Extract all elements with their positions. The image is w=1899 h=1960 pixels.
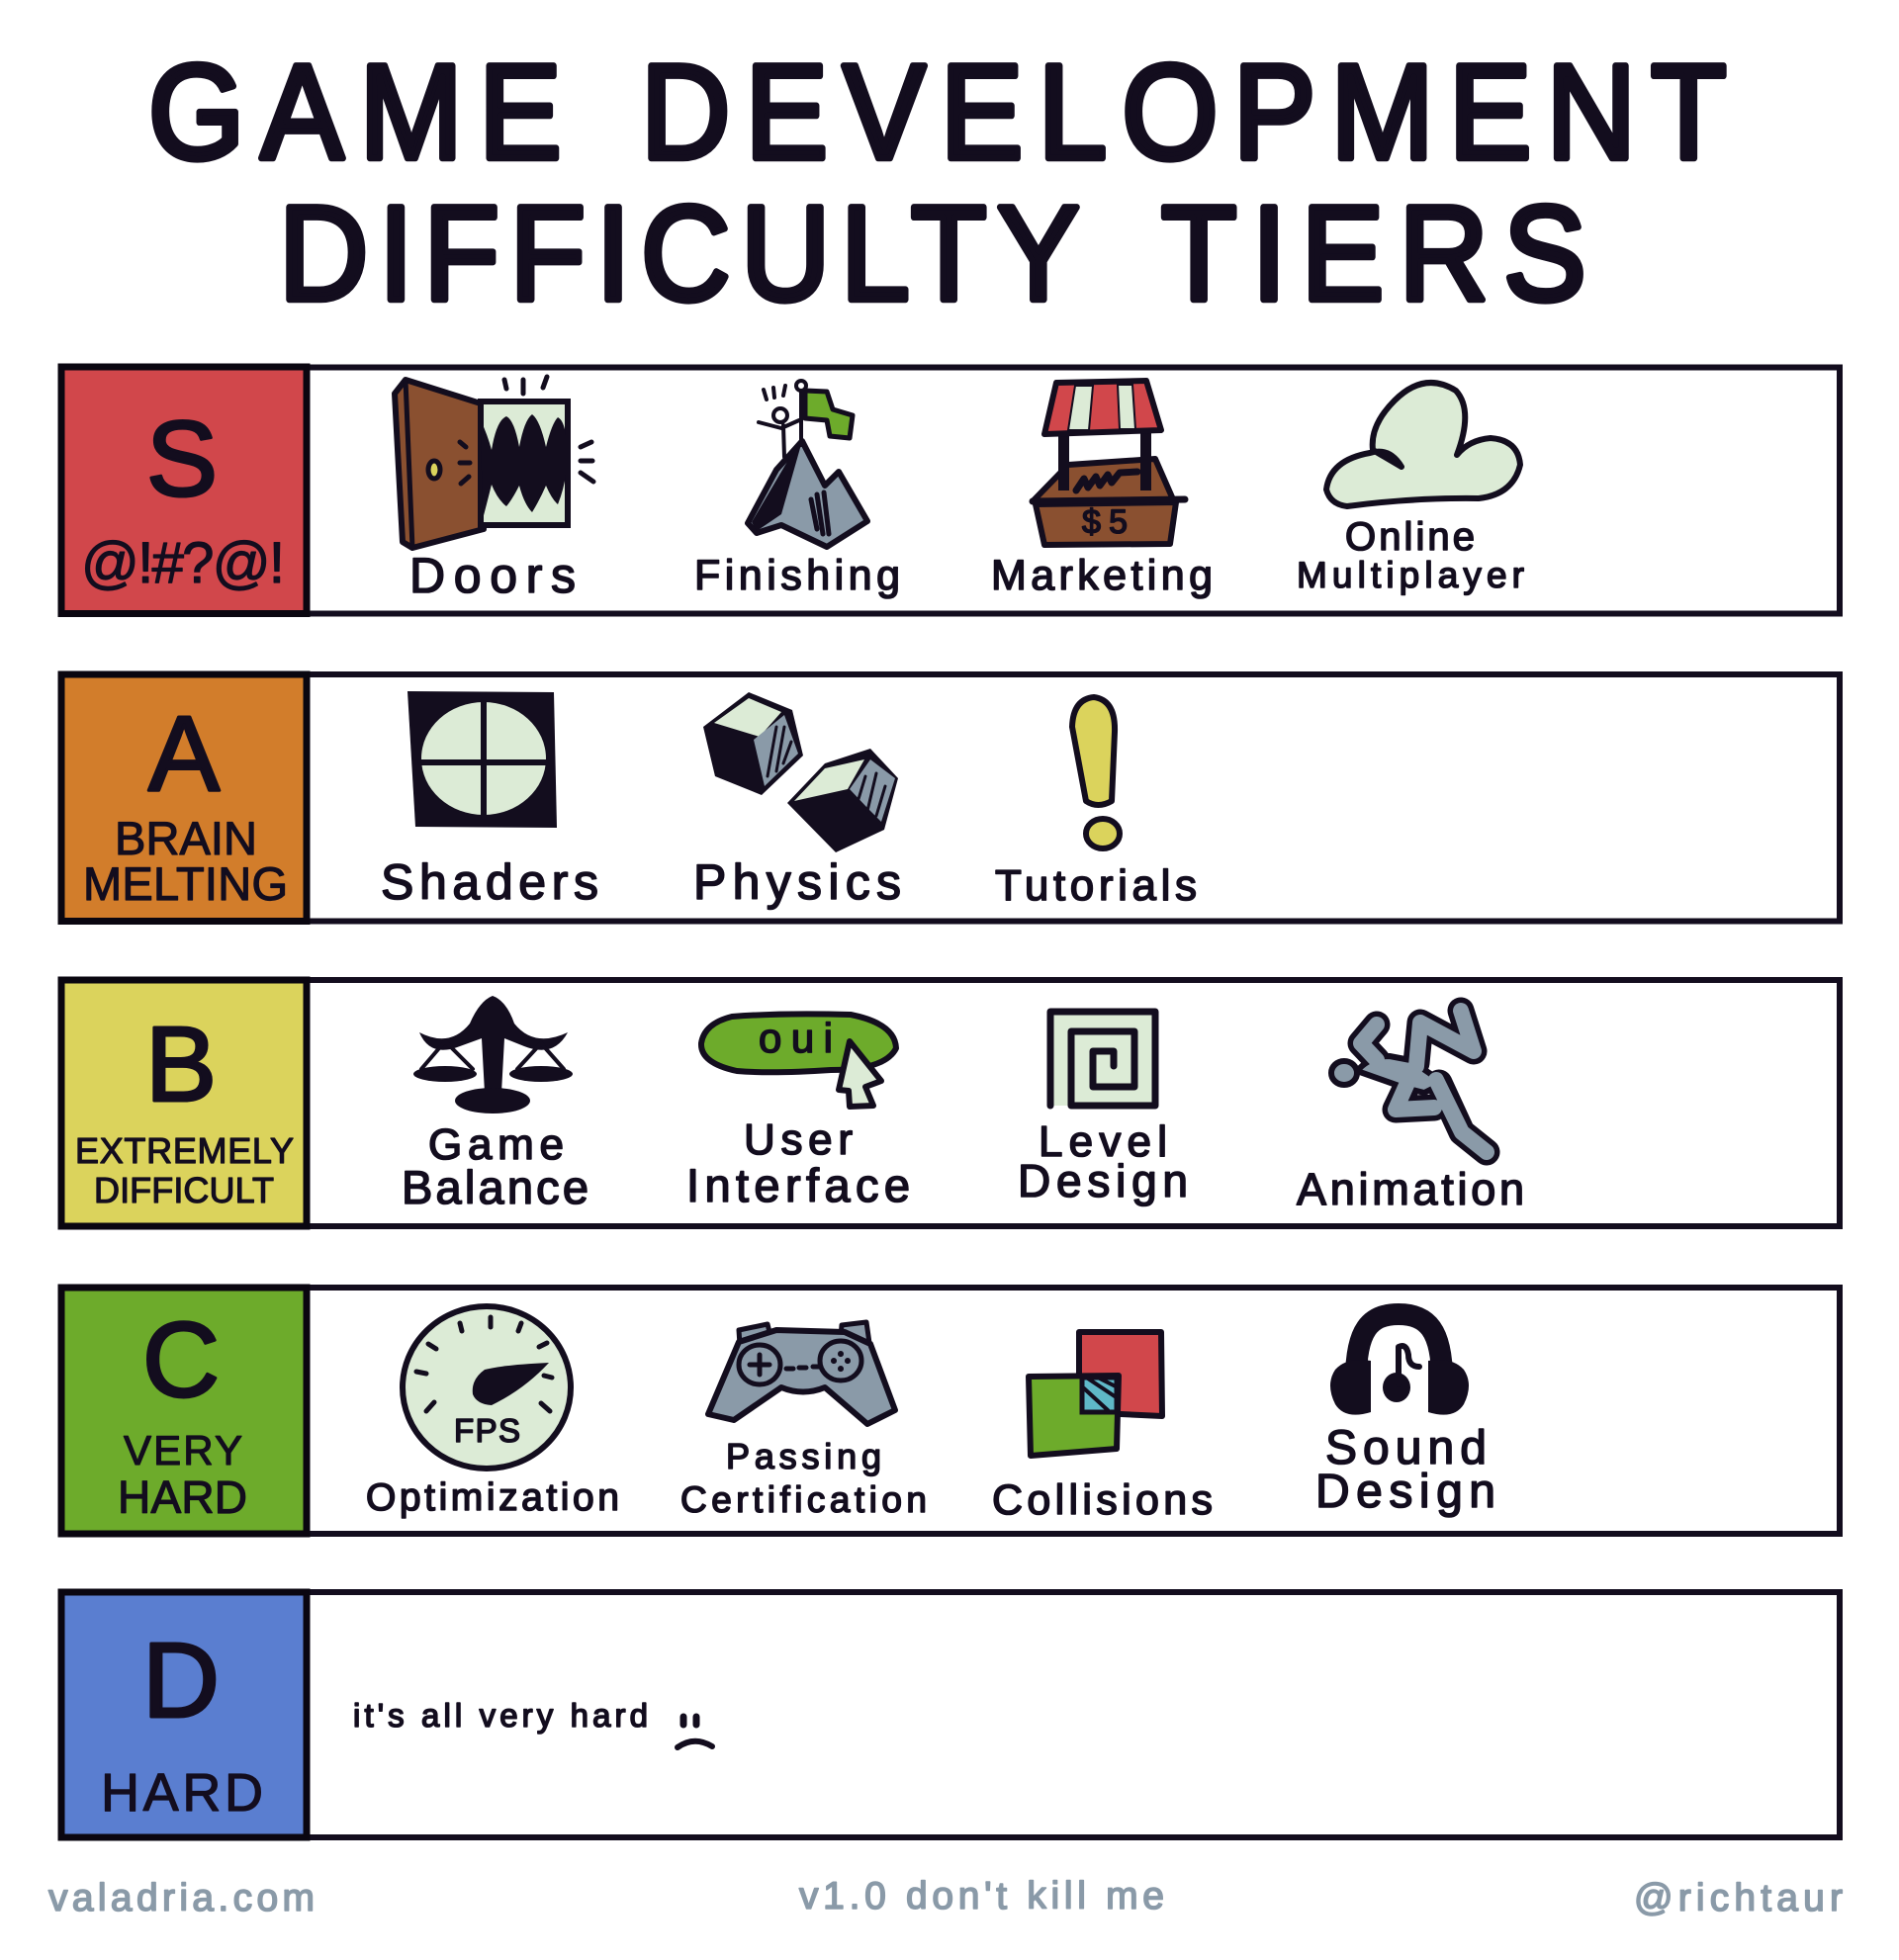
tier A label cell: MELTING	[83, 857, 288, 910]
text: it's all very hard: it's all very hard	[353, 1697, 648, 1734]
tier B label cell	[61, 980, 307, 1226]
icon: market stall: $5	[1082, 503, 1128, 541]
icon: exclamation mark	[1072, 697, 1120, 848]
panel: tier A	[61, 674, 1840, 922]
icon: running figure	[1331, 1011, 1487, 1152]
tier S label cell: @!#?@!	[81, 531, 285, 595]
icon: FPS gauge	[403, 1306, 571, 1469]
tier S label cell: S	[146, 399, 218, 518]
icon: door with teeth	[395, 377, 593, 548]
item labels: tier S: Finishing	[694, 552, 900, 599]
title	[148, 37, 1727, 328]
title: DIFFICULTY	[279, 178, 1080, 328]
icon: headphones	[1330, 1314, 1469, 1415]
icon: OUI button with cursor	[701, 1014, 896, 1107]
icon: shader sphere	[407, 691, 557, 828]
panel: tier S	[61, 367, 1840, 613]
tier C label cell: HARD	[118, 1471, 247, 1523]
item labels: tier B	[402, 1115, 1524, 1214]
item labels: tier A	[381, 854, 1197, 910]
tier A label cell: A	[148, 693, 220, 813]
footer credits: valadria.com	[48, 1877, 315, 1919]
tier S label cell	[61, 367, 307, 613]
item labels: tier B: Game	[428, 1120, 564, 1169]
item labels: tier B: Design	[1018, 1155, 1188, 1206]
item labels: tier C	[366, 1422, 1495, 1524]
tier A label cell: BRAIN	[115, 812, 257, 864]
tier C label cell: C	[142, 1299, 220, 1419]
tier B label cell: B	[145, 1004, 217, 1123]
item labels: tier B: Balance	[402, 1161, 588, 1213]
tier C label cell	[61, 1288, 307, 1534]
panel: tier D	[61, 1592, 1840, 1837]
icon: balance scales	[413, 996, 573, 1114]
item labels: tier S: Multiplayer	[1297, 555, 1524, 595]
title: DEVELOPMENT	[641, 37, 1727, 187]
icon: game controller	[708, 1322, 895, 1424]
tier A label cell	[61, 674, 307, 922]
tier D label cell	[61, 1592, 307, 1837]
item labels: tier C: Certification	[680, 1479, 927, 1520]
item labels: tier A: Shaders	[381, 854, 598, 910]
tier B label cell: DIFFICULT	[94, 1170, 274, 1210]
item labels: tier B: User	[744, 1115, 853, 1164]
icon: mountain with flag	[748, 381, 867, 547]
icon: physics cubes	[703, 692, 898, 852]
item labels: tier S: Online	[1345, 515, 1475, 559]
tier D label cell: HARD	[101, 1763, 263, 1823]
item labels: tier S: Doors	[409, 548, 576, 603]
item labels: tier S	[409, 515, 1524, 603]
title: GAME	[148, 37, 562, 187]
item labels: tier A: Tutorials	[995, 861, 1197, 910]
icon: market stall	[1033, 381, 1185, 545]
item labels: tier S: Marketing	[991, 552, 1213, 599]
item labels: tier B: Animation	[1297, 1164, 1524, 1214]
title: TIERS	[1161, 178, 1586, 328]
icon: colliding squares	[1029, 1332, 1162, 1456]
panel: tier B	[61, 980, 1840, 1226]
item labels: tier A: Physics	[693, 854, 901, 910]
item labels: tier C: Design	[1315, 1466, 1495, 1518]
item labels: tier C: Passing	[726, 1436, 881, 1476]
footer credits	[48, 1875, 1843, 1919]
item labels: tier C: Collisions	[992, 1476, 1213, 1524]
icon: OUI button with cursor: oui	[759, 1015, 833, 1061]
icon: cloud	[1326, 383, 1520, 506]
footer credits: @richtaur	[1634, 1877, 1843, 1919]
footer credits: v1.0 don't kill me	[799, 1875, 1164, 1917]
tier C label cell: VERY	[124, 1427, 242, 1473]
item labels: tier B: Interface	[686, 1159, 910, 1211]
icon: sad face	[678, 1717, 712, 1747]
item labels: tier C: Sound	[1325, 1422, 1487, 1474]
panel: tier C	[61, 1288, 1840, 1534]
item labels: tier B: Level	[1039, 1117, 1167, 1166]
tier D label cell: D	[142, 1620, 220, 1739]
item labels: tier C: Optimization	[366, 1476, 619, 1519]
icon: FPS gauge: FPS	[454, 1412, 520, 1449]
icon: level maze spiral	[1050, 1012, 1155, 1106]
tier B label cell: EXTREMELY	[75, 1130, 294, 1171]
